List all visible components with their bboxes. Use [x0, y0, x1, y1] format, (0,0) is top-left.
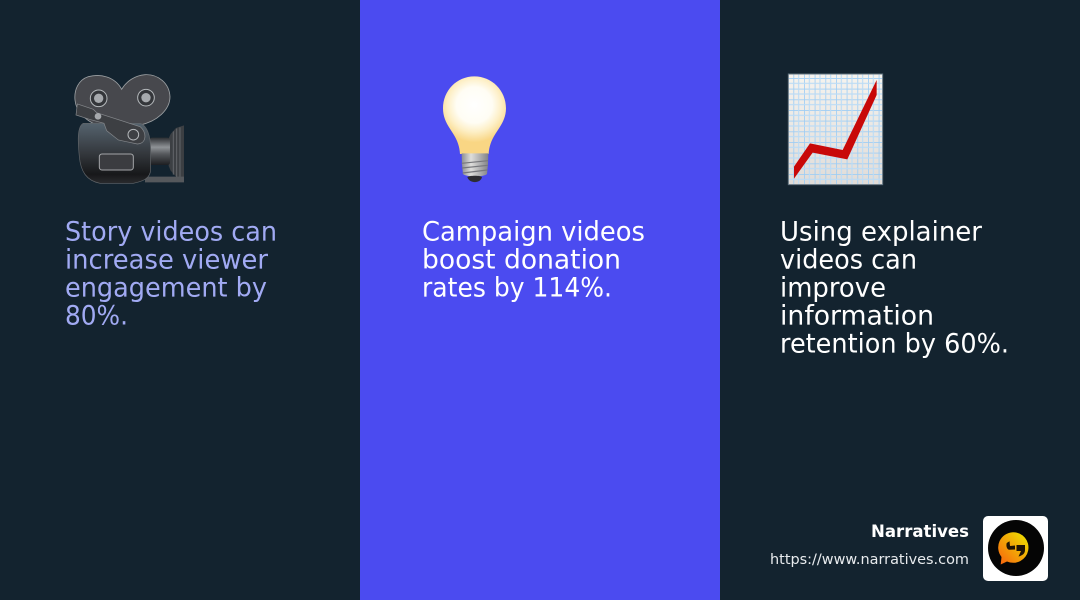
- text: explainer videos statistic: improve: [780, 272, 886, 304]
- text: campaign videos statistic: [422, 216, 645, 304]
- panel: story videos: [0, 0, 360, 600]
- text: campaign videos statistic: rates by 114%.: [422, 272, 612, 304]
- text: campaign videos statistic: boost donation: [422, 244, 621, 276]
- panel: campaign videos: [360, 0, 720, 600]
- brand name and url: https://www.narratives.com: [770, 552, 969, 568]
- text: explainer videos statistic: retention by 60%.: [780, 328, 1009, 360]
- footer: brand: [770, 516, 1048, 581]
- icon: rising chart: [788, 74, 884, 186]
- icon: light bulb: [443, 76, 506, 182]
- brand name and url: Narratives: [871, 522, 969, 541]
- text: explainer videos statistic: [780, 216, 1009, 360]
- text: story videos statistic: Story videos can: [65, 216, 277, 248]
- icon: movie camera: [74, 74, 184, 184]
- text: explainer videos statistic: videos can: [780, 244, 917, 276]
- text: story videos statistic: 80%.: [65, 300, 128, 332]
- text: campaign videos statistic: Campaign videos: [422, 216, 645, 248]
- text: story videos statistic: increase viewer: [65, 244, 269, 276]
- logo: [983, 516, 1048, 581]
- text: story videos statistic: engagement by: [65, 272, 267, 304]
- panel: explainer videos: [720, 0, 1080, 600]
- text: explainer videos statistic: information: [780, 300, 934, 332]
- text: explainer videos statistic: Using explainer: [780, 216, 983, 248]
- text: story videos statistic: [65, 216, 277, 332]
- brand name and url: [770, 522, 969, 568]
